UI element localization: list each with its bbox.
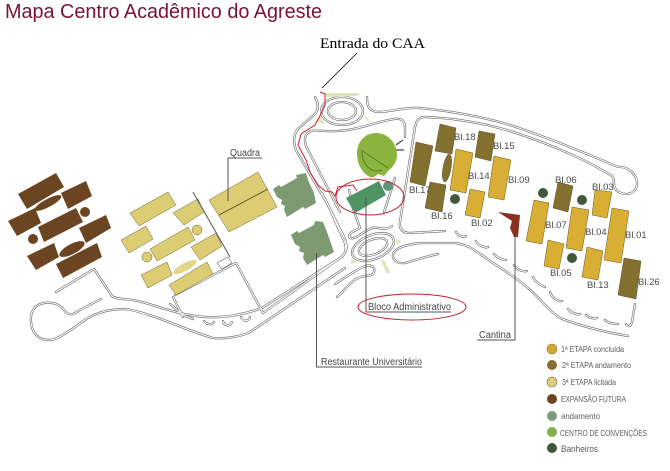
building: quadra — [209, 172, 277, 232]
building: cantina — [498, 212, 520, 237]
red walking route — [298, 92, 357, 196]
bloco administrativo label: Bloco Administrativo — [368, 302, 451, 313]
restaurante label — [316, 253, 422, 368]
block labels: Bl.04 — [585, 227, 607, 238]
blocks: 2ª etapa — [410, 124, 641, 299]
bloco administrativo label — [366, 198, 451, 313]
buildings: restaurante — [273, 173, 334, 265]
block labels: Bl.07 — [545, 220, 567, 231]
block labels: Bl.09 — [508, 175, 530, 186]
cantina label — [477, 237, 515, 341]
quadra label: Quadra — [230, 148, 260, 159]
red highlight ellipse: label — [358, 294, 466, 320]
block labels: Bl.03 — [592, 182, 614, 193]
blocks: 1ª etapa — [450, 149, 629, 280]
block labels: Bl.18 — [454, 132, 476, 143]
block labels: Bl.02 — [471, 218, 493, 229]
cantina label: Cantina — [479, 330, 511, 341]
block labels: Bl.14 — [468, 171, 490, 182]
block labels: Bl.13 — [587, 280, 609, 291]
legend: 3ª ETAPA licitada — [562, 378, 616, 387]
legend — [547, 344, 647, 454]
red highlight ellipse: bloco — [336, 179, 404, 215]
entrada label — [320, 36, 425, 88]
block labels: Bl.06 — [555, 175, 577, 186]
legend: 1ª ETAPA concluída — [561, 345, 624, 354]
block labels: Bl.17 — [409, 185, 431, 196]
legend: CENTRO DE CONVENÇÕES — [560, 429, 647, 438]
entrada label: Entrada do CAA — [320, 36, 425, 52]
building zone: 3ª etapa — [121, 192, 232, 295]
legend: Banheiros — [561, 444, 598, 454]
building zone: expansão futura — [8, 173, 111, 278]
restaurante label: Restaurante Universitário — [321, 357, 422, 368]
building: centro de convenções — [357, 133, 404, 177]
building: bloco administrativo — [346, 181, 393, 213]
banheiros — [450, 188, 587, 263]
legend: 2ª ETAPA andamento — [562, 361, 631, 370]
block labels — [409, 132, 660, 291]
block labels: Bl.26 — [638, 277, 660, 288]
block labels: Bl.05 — [550, 268, 572, 279]
block labels: Bl.15 — [493, 141, 515, 152]
legend: andamento — [561, 412, 601, 421]
block labels: Bl.01 — [625, 230, 647, 241]
block labels: Bl.16 — [431, 211, 453, 222]
legend: EXPANSÃO FUTURA — [561, 395, 627, 404]
title: Mapa Centro Acadêmico do Agreste — [5, 1, 322, 23]
road network — [31, 93, 637, 340]
quadra label — [228, 148, 262, 201]
